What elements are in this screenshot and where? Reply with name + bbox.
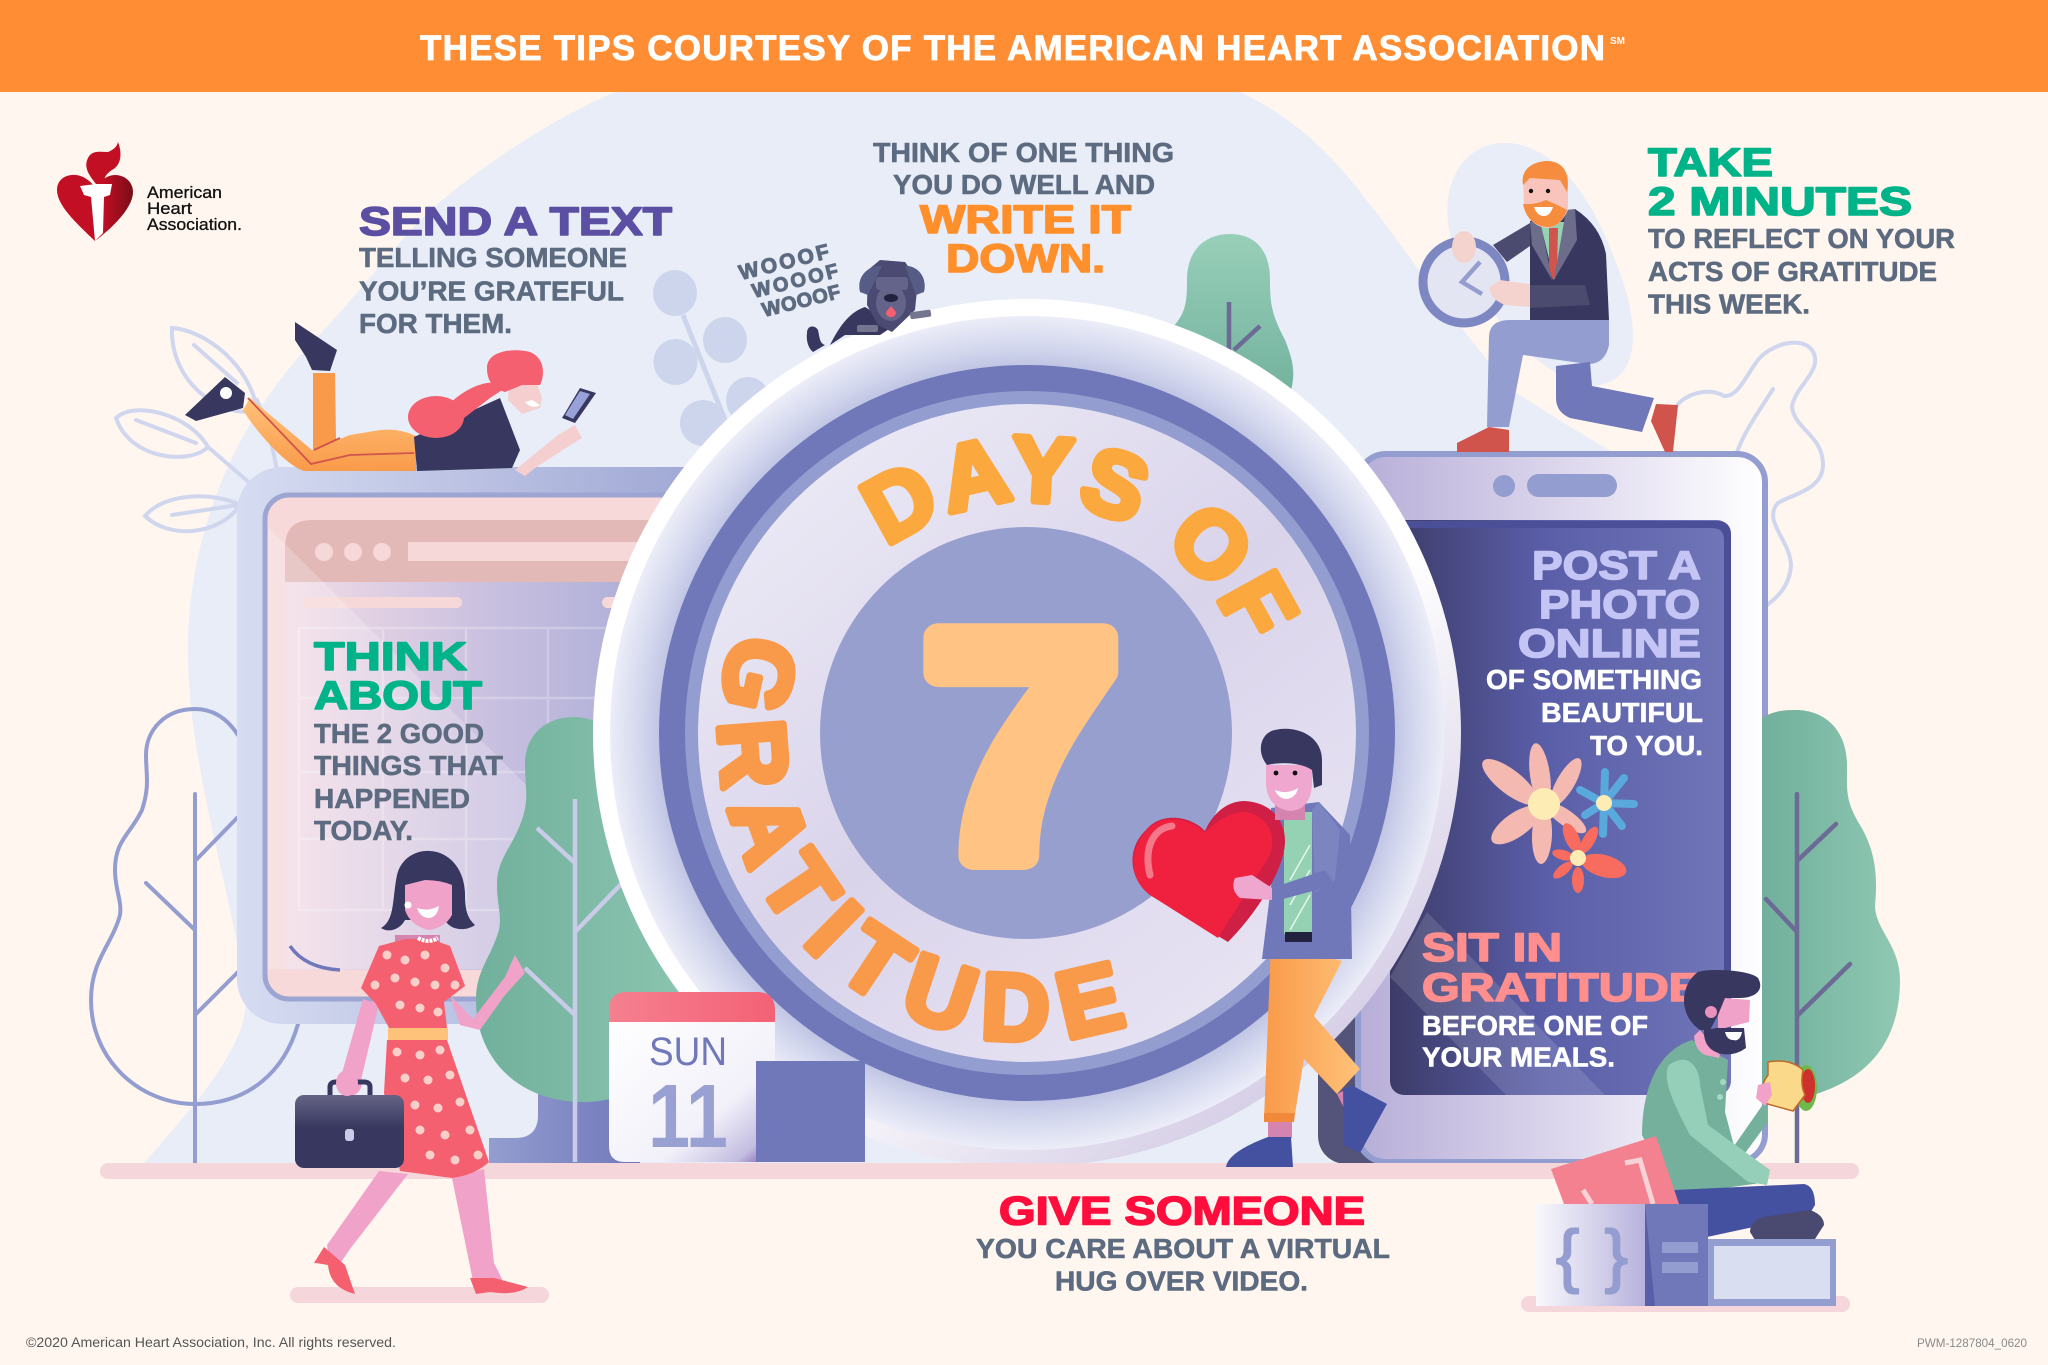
bearded man with sandwich: { } xyxy=(1556,1216,1628,1294)
text: take 2 minutes: ACTS OF GRATITUDE xyxy=(1648,256,1937,287)
calendar: SUN xyxy=(649,1030,727,1074)
text: post a photo: BEAUTIFUL xyxy=(1541,697,1703,728)
blue square block xyxy=(756,1061,865,1162)
text: dog barking: WOOOF xyxy=(737,240,832,285)
calendar screen panel xyxy=(285,560,775,970)
text: take 2 minutes: THIS WEEK. xyxy=(1648,288,1810,320)
green middle tree xyxy=(476,717,720,1162)
briefcase xyxy=(295,1082,404,1168)
logo wordmark xyxy=(147,184,242,234)
top green tree xyxy=(1170,234,1293,395)
text: sit in gratitude xyxy=(1422,926,1701,1072)
text: take 2 minutes xyxy=(1648,141,1955,320)
text: dog barking: WOOOF xyxy=(750,260,841,303)
text: think about xyxy=(314,635,503,846)
text: give someone xyxy=(976,1190,1390,1296)
heart logo xyxy=(57,142,133,241)
right phone xyxy=(1358,454,1765,1162)
document code: PWM-1287804_0620 xyxy=(1917,1336,2027,1350)
man holding heart xyxy=(1132,729,1387,1167)
text: take 2 minutes: TAKE xyxy=(1648,141,1773,185)
big number 7: 7 xyxy=(924,568,1118,924)
header band: THESE TIPS COURTESY OF THE AMERICAN HEART ASSOCIATION xyxy=(420,29,1605,68)
left outline tree xyxy=(91,709,298,1165)
header band: SM xyxy=(1610,36,1625,47)
calendar: 11 xyxy=(648,1067,728,1167)
right green tree xyxy=(1762,710,1900,1164)
logo wordmark: Association. xyxy=(147,216,242,234)
text: think about: HAPPENED xyxy=(314,783,470,814)
text: take 2 minutes: 2 MINUTES xyxy=(1648,180,1912,224)
dog xyxy=(807,260,931,352)
text: dog barking xyxy=(737,240,843,322)
tablet stand xyxy=(489,1090,640,1163)
curved title: days of: DAYS OF xyxy=(857,433,1301,634)
text: sit in gratitude: SIT IN xyxy=(1422,926,1562,970)
flowers xyxy=(1476,742,1634,893)
text: write it down xyxy=(873,137,1174,281)
text: think about: THE 2 GOOD xyxy=(314,718,484,749)
walking shadow xyxy=(290,1287,549,1303)
woman walking with briefcase xyxy=(290,851,549,1303)
text: post a photo: ONLINE xyxy=(1518,622,1701,666)
text: send a text: YOU’RE GRATEFUL xyxy=(359,276,624,306)
phone shadow xyxy=(1318,960,1438,1164)
text: post a photo xyxy=(1486,544,1703,761)
text: post a photo: PHOTO xyxy=(1539,583,1700,627)
text: sit in gratitude: GRATITUDE xyxy=(1422,966,1701,1010)
man with clock xyxy=(1423,161,1678,452)
text: think about: THINK xyxy=(314,635,467,679)
text: post a photo: POST A xyxy=(1532,544,1701,588)
text: sit in gratitude: BEFORE ONE OF xyxy=(1422,1010,1648,1041)
phone screen xyxy=(1390,520,1731,1095)
ground bar xyxy=(100,1163,1859,1179)
text: take 2 minutes: TO REFLECT ON YOUR xyxy=(1648,223,1955,254)
phone camera and speaker xyxy=(1493,474,1617,497)
text: give someone: HUG OVER VIDEO. xyxy=(1055,1266,1308,1296)
text: dog barking: WOOOF xyxy=(760,281,843,322)
text: think about: ABOUT xyxy=(314,674,482,718)
text: think about: TODAY. xyxy=(314,815,413,846)
main circle badge xyxy=(593,299,1461,1163)
text: give someone: YOU CARE ABOUT A VIRTUAL xyxy=(976,1233,1390,1264)
left browser tablet xyxy=(237,467,797,1024)
text: post a photo: OF SOMETHING xyxy=(1486,664,1702,695)
text: sit in gratitude: YOUR MEALS. xyxy=(1422,1042,1615,1072)
background blob xyxy=(144,92,1620,1163)
text: post a photo: TO YOU. xyxy=(1590,730,1703,761)
right squiggle plant outline xyxy=(1678,343,1823,605)
text: give someone: GIVE SOMEONE xyxy=(999,1190,1365,1234)
text: write it down: WRITE IT xyxy=(920,198,1131,242)
berry branch xyxy=(653,270,770,470)
leaf plant outlines xyxy=(116,328,277,531)
curved title: gratitude: GRATITUDE xyxy=(715,638,1128,1044)
header band xyxy=(0,0,2048,92)
logo wordmark: American xyxy=(147,184,222,202)
text: send a text: SEND A TEXT xyxy=(359,200,672,244)
text: write it down: YOU DO WELL AND xyxy=(893,169,1155,200)
text: think about: THINGS THAT xyxy=(314,750,503,781)
text: send a text: FOR THEM. xyxy=(359,308,512,339)
text: send a text: TELLING SOMEONE xyxy=(359,242,627,273)
calendar xyxy=(609,992,775,1167)
copyright: ©2020 American Heart Association, Inc. All rights reserved. xyxy=(26,1335,396,1350)
blob behind clock man xyxy=(1447,143,1633,386)
bearded man with sandwich xyxy=(1521,970,1850,1312)
sandwich xyxy=(1762,1061,1817,1111)
text: write it down: DOWN. xyxy=(946,237,1105,281)
woman texting xyxy=(185,322,596,476)
text: write it down: THINK OF ONE THING xyxy=(873,137,1174,168)
logo wordmark: Heart xyxy=(147,200,192,218)
text: send a text xyxy=(359,200,672,339)
